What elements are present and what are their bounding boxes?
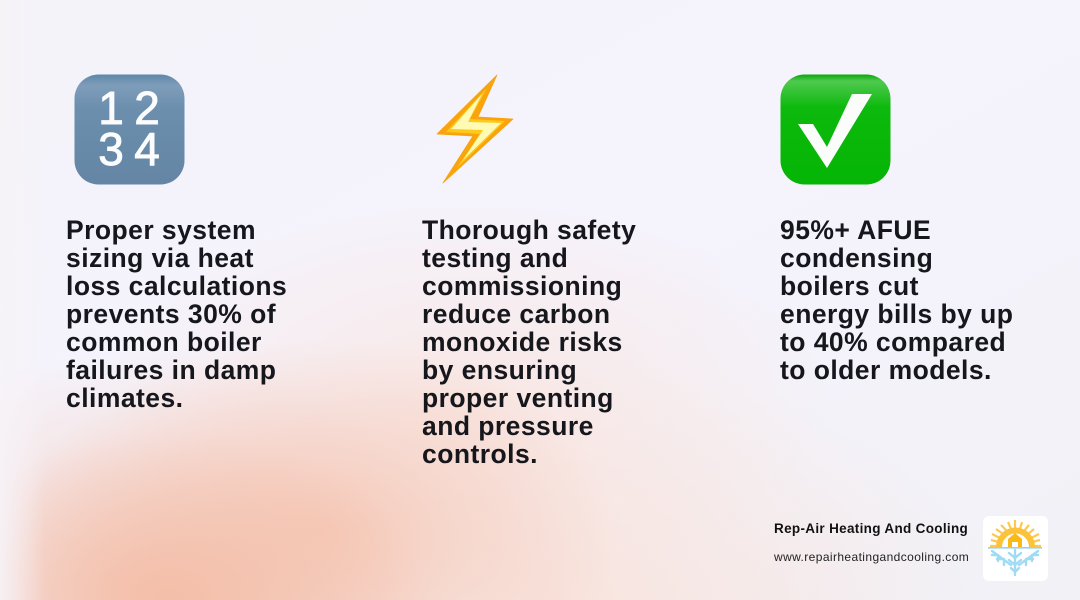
text: safety testing: Thorough safety (422, 215, 636, 245)
text: safety testing: testing and (422, 243, 568, 273)
brand name: Rep-Air Heating And Cooling (774, 521, 968, 536)
text: safety testing: monoxide risks (422, 327, 623, 357)
text: condensing boilers: 95%+ AFUE (780, 215, 931, 245)
text: condensing boilers: to 40% compared (780, 327, 1006, 357)
text: system sizing: climates. (66, 383, 183, 413)
logo: sun, house and snowflake (983, 516, 1048, 581)
text: safety testing: controls. (422, 439, 538, 469)
text: system sizing: common boiler (66, 327, 262, 357)
text: system sizing: sizing via heat (66, 243, 254, 273)
text: safety testing: by ensuring (422, 355, 577, 385)
text: condensing boilers (780, 215, 1013, 385)
text: safety testing: proper venting (422, 383, 614, 413)
text: system sizing: loss calculations (66, 271, 287, 301)
text: condensing boilers: condensing (780, 243, 933, 273)
text: system sizing (66, 215, 287, 413)
icon: 1234 keycap (74, 74, 184, 184)
icon: 1234 keycap: 2 (134, 82, 160, 134)
icon: green check mark (780, 74, 890, 184)
icon: 1234 keycap: 4 (134, 123, 160, 175)
text: safety testing (422, 215, 636, 469)
website url: www.repairheatingandcooling.com (774, 550, 969, 564)
text: safety testing: commissioning (422, 271, 622, 301)
icon: 1234 keycap: 1 (98, 82, 124, 134)
icon: 1234 keycap: 3 (98, 123, 124, 175)
icon: lightning bolt (436, 74, 514, 184)
text: system sizing: failures in damp (66, 355, 276, 385)
text: condensing boilers: boilers cut (780, 271, 919, 301)
text: condensing boilers: to older models. (780, 355, 992, 385)
text: safety testing: and pressure (422, 411, 594, 441)
text: system sizing: Proper system (66, 215, 256, 245)
text: condensing boilers: energy bills by up (780, 299, 1013, 329)
text: safety testing: reduce carbon (422, 299, 610, 329)
text: system sizing: prevents 30% of (66, 299, 276, 329)
